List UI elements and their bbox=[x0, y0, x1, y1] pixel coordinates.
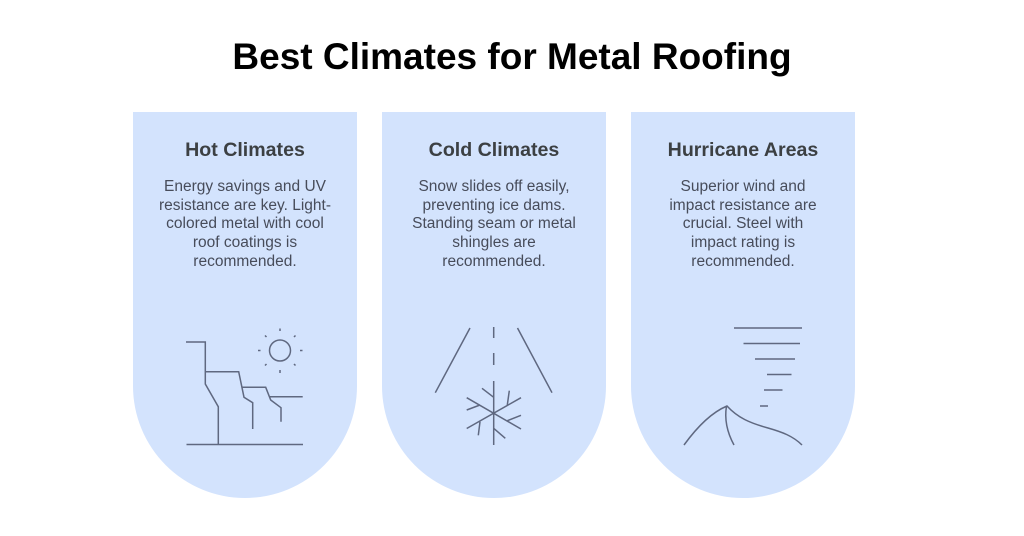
text block: hot climates: roof coatings is bbox=[193, 234, 297, 251]
text block: hot climates bbox=[159, 178, 331, 270]
text block: cold climates: Snow slides off easily, bbox=[418, 178, 570, 195]
title: Best Climates for Metal Roofing bbox=[232, 36, 792, 77]
text block: cold climates: preventing ice dams. bbox=[422, 197, 566, 214]
text block: hurricane areas: impact resistance are bbox=[669, 197, 817, 214]
text block: cold climates: recommended. bbox=[442, 253, 546, 270]
heading: hurricane areas: Hurricane Areas bbox=[668, 139, 818, 161]
heading: hot climates: Hot Climates bbox=[185, 139, 305, 161]
text block: hot climates: colored metal with cool bbox=[166, 215, 324, 232]
text block: hot climates: recommended. bbox=[193, 253, 297, 270]
text block: cold climates bbox=[412, 178, 576, 270]
text block: hot climates: Energy savings and UV bbox=[164, 178, 326, 195]
text block: cold climates: shingles are bbox=[452, 234, 536, 251]
panel: cold climates bbox=[382, 112, 606, 498]
icon: road and snowflake bbox=[434, 327, 553, 445]
text block: hurricane areas: impact rating is bbox=[691, 234, 795, 251]
heading: cold climates: Cold Climates bbox=[429, 139, 559, 161]
icon: tornado over hill bbox=[684, 327, 802, 446]
text block: hurricane areas: recommended. bbox=[691, 253, 795, 270]
panel: hurricane areas bbox=[631, 112, 855, 498]
text block: hot climates: resistance are key. Light- bbox=[159, 197, 331, 214]
text block: hurricane areas: crucial. Steel with bbox=[683, 215, 803, 232]
text block: cold climates: Standing seam or metal bbox=[412, 215, 576, 232]
panel: hot climates bbox=[133, 112, 357, 498]
text block: hurricane areas: Superior wind and bbox=[681, 178, 805, 195]
text block: hurricane areas bbox=[669, 178, 817, 270]
icon: canyon and sun bbox=[186, 328, 303, 446]
